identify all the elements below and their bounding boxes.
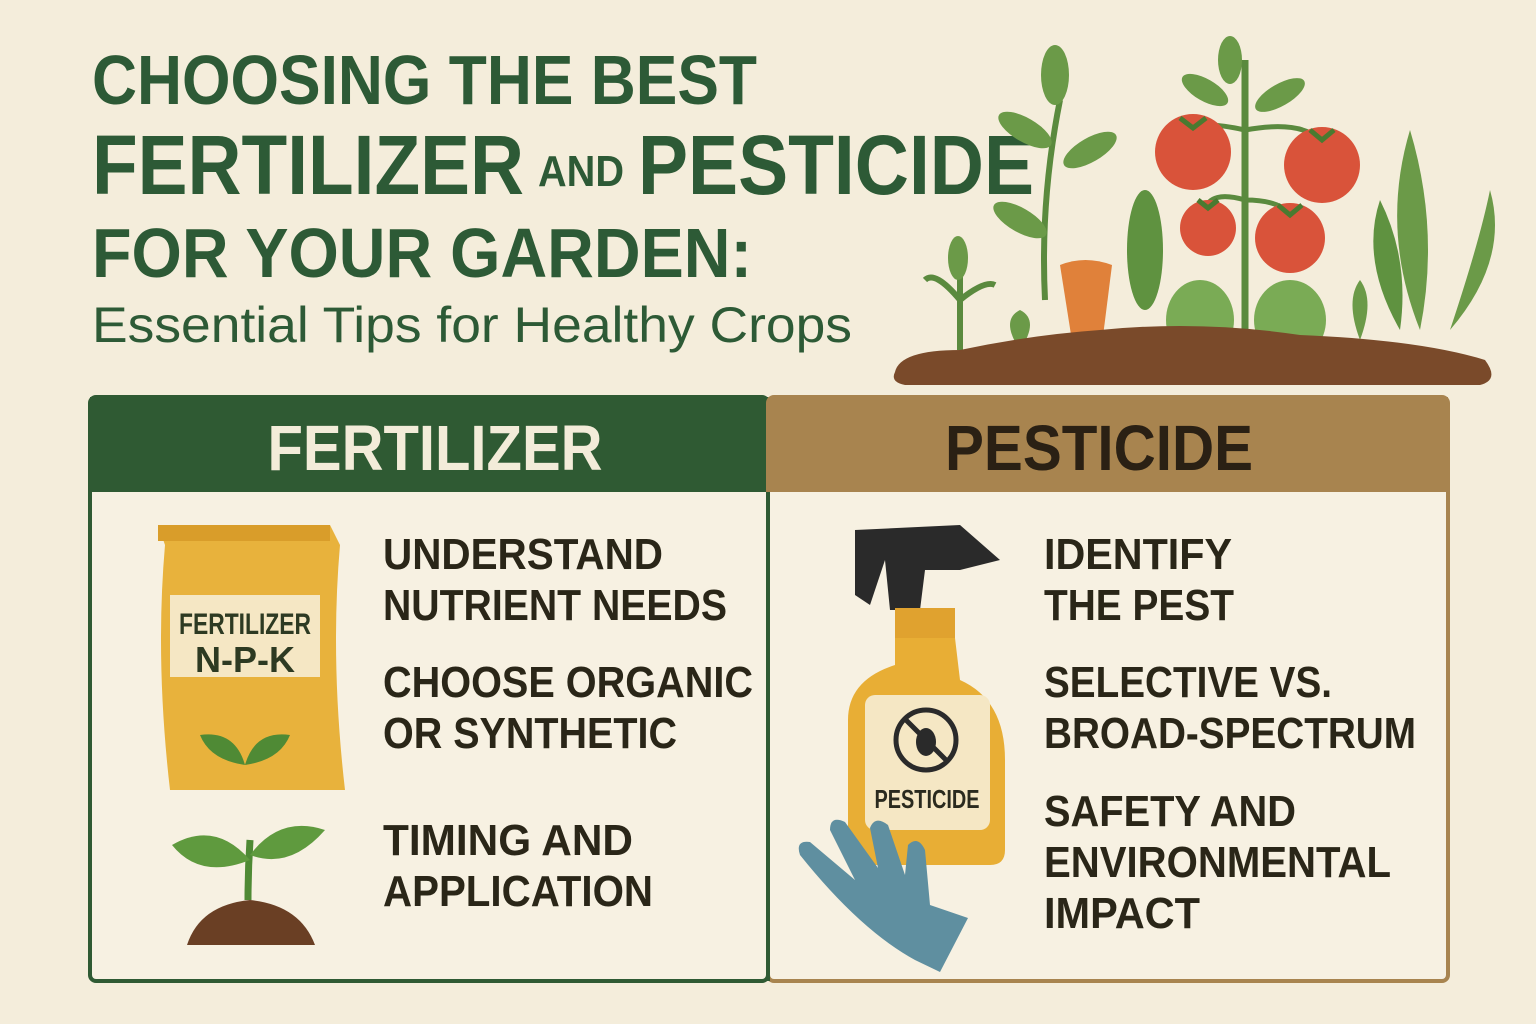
- text: pesticide tips: IMPACT: [1044, 889, 1200, 938]
- icon: glove: [799, 820, 968, 972]
- text: pesticide tips: SAFETY AND: [1044, 787, 1296, 836]
- heading: pesticide: [768, 397, 1448, 492]
- text: pesticide tips: BROAD-SPECTRUM: [1044, 709, 1416, 758]
- title: FOR YOUR GARDEN:: [92, 214, 752, 292]
- text: pesticide tips: [1044, 530, 1416, 938]
- title: FERTILIZER: [92, 118, 524, 212]
- title: PESTICIDE: [638, 118, 1034, 212]
- text: fertilizer tips: NUTRIENT NEEDS: [383, 581, 727, 630]
- text: pesticide tips: ENVIRONMENTAL: [1044, 838, 1391, 887]
- text: fertilizer tips: [383, 530, 753, 916]
- subtitle: Essential Tips for Healthy Crops: [92, 297, 852, 353]
- icon: spray bottle: PESTICIDE: [874, 784, 980, 814]
- text: pesticide tips: THE PEST: [1044, 581, 1234, 630]
- icon: fertilizer bag: N-P-K: [195, 639, 295, 680]
- title: [92, 41, 1034, 292]
- icon: fertilizer bag: [158, 525, 345, 790]
- text: pesticide tips: SELECTIVE VS.: [1044, 658, 1332, 707]
- panel: fertilizer: [90, 397, 768, 981]
- panel: pesticide: [768, 397, 1448, 981]
- heading: pesticide: PESTICIDE: [945, 412, 1253, 484]
- heading: fertilizer: FERTILIZER: [268, 412, 602, 484]
- title: CHOOSING THE BEST: [92, 41, 757, 119]
- icon: spray bottle: [848, 525, 1005, 865]
- icon: sprout: [172, 826, 325, 945]
- text: fertilizer tips: CHOOSE ORGANIC: [383, 658, 753, 707]
- text: fertilizer tips: OR SYNTHETIC: [383, 709, 677, 758]
- text: fertilizer tips: APPLICATION: [383, 867, 653, 916]
- text: pesticide tips: IDENTIFY: [1044, 530, 1232, 579]
- text: fertilizer tips: UNDERSTAND: [383, 530, 663, 579]
- illustration: garden: [894, 36, 1495, 385]
- icon: fertilizer bag: FERTILIZER: [179, 608, 311, 641]
- title: AND: [538, 147, 624, 196]
- heading: fertilizer: [90, 397, 768, 492]
- text: fertilizer tips: TIMING AND: [383, 816, 633, 865]
